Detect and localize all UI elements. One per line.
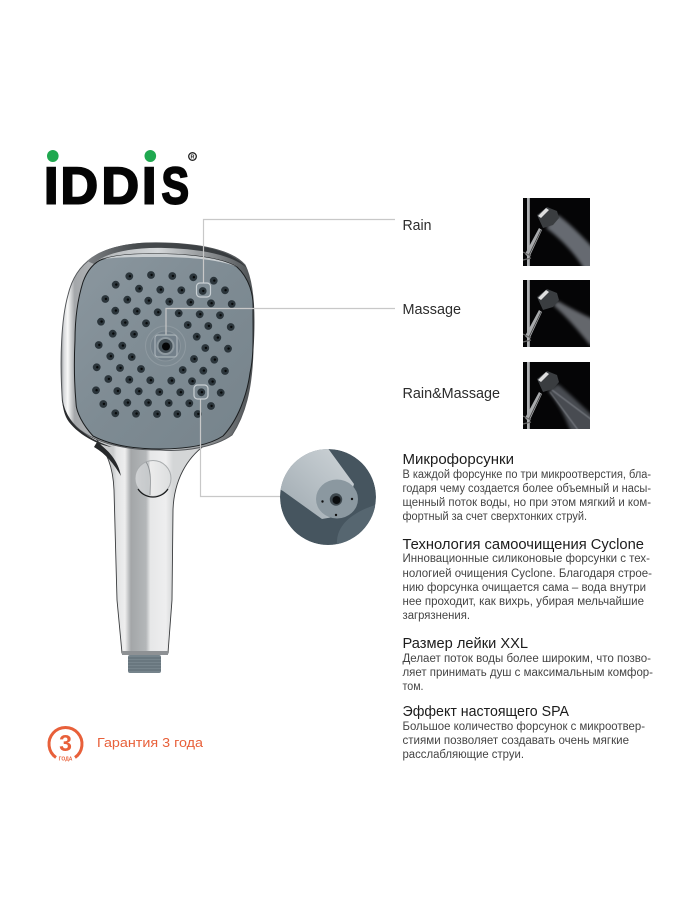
nozzle face <box>74 254 253 449</box>
shower head product <box>61 243 254 673</box>
body text: нию форсунка очищается сама – вода внутри <box>402 582 646 594</box>
mode label: Massage: Massage <box>402 302 461 318</box>
handle <box>97 440 205 653</box>
logo wordmark: D <box>60 158 98 216</box>
body text: В каждой форсунке по три микроотверстия, бла- <box>402 469 651 481</box>
callout line: Massage <box>155 308 395 357</box>
mode label: Rain&Massage: Rain&Massage <box>402 386 500 402</box>
body text <box>402 721 645 761</box>
body text: нее проходит, как вихрь, убирая мельчайшие <box>402 596 644 608</box>
registered mark <box>189 153 196 160</box>
logo green dots <box>47 150 156 162</box>
body text: ляет принимать душ с максимальным комфор- <box>402 667 653 679</box>
body text: Большое количество форсунок с микроотвер- <box>402 721 645 733</box>
badge ring and number: 3 <box>59 730 72 756</box>
warranty text: Гарантия 3 года <box>97 735 204 750</box>
warranty badge <box>49 728 204 762</box>
photo: massage mode <box>523 280 590 347</box>
badge ring and number: ГОДА <box>59 756 73 762</box>
feature: XXL size <box>402 636 653 693</box>
body text: том. <box>402 681 424 693</box>
face highlight <box>103 254 237 267</box>
body text: щенный поток воды, но при этом мягкий и ком- <box>402 497 651 509</box>
logo wordmark: D <box>102 158 139 216</box>
mode button <box>135 460 171 497</box>
body text: загрязнения. <box>402 610 470 622</box>
head chrome rim <box>61 243 254 450</box>
neck shadow <box>94 442 121 476</box>
heading: Размер лейки XXL <box>402 636 528 652</box>
feature: micro-nozzles <box>402 452 651 523</box>
photo: rain and massage mode <box>523 362 590 429</box>
photo: rain mode <box>523 198 590 266</box>
heading: Эффект настоящего SPA <box>402 704 569 720</box>
body text: Делает поток воды более широким, что позво- <box>402 653 651 665</box>
logo: IDDIS <box>44 150 196 216</box>
body text: Инновационные силиконовые форсунки с тех- <box>402 553 650 565</box>
feature: SPA effect <box>402 704 645 761</box>
callout line: Rain <box>196 220 395 297</box>
head dark lower crescent <box>62 395 112 447</box>
heading: Микрофорсунки <box>402 452 514 468</box>
body text: расслабляющие струи. <box>402 749 524 761</box>
body text: стиями позволяет создавать очень мягкие <box>402 735 629 747</box>
body text: годаря чему создается более объемный и насы- <box>402 483 651 495</box>
heading: Технология самоочищения Cyclone <box>402 537 644 553</box>
head dark top band <box>87 243 247 268</box>
badge ring and number <box>49 728 82 762</box>
logo wordmark <box>44 158 189 216</box>
body text: фортный за счет сверхтонких струй. <box>402 511 587 523</box>
nozzle detail circle <box>280 449 376 545</box>
feature: Cyclone self-cleaning <box>402 537 652 622</box>
hose thread <box>122 651 168 673</box>
body text <box>402 469 651 523</box>
logo wordmark: S <box>162 158 189 216</box>
body text: нологией очищения Cyclone. Благодаря строе- <box>402 568 652 580</box>
callout line: micro-nozzle <box>194 385 281 496</box>
center nozzle <box>146 326 186 366</box>
registered mark: R <box>191 154 195 160</box>
logo wordmark: I <box>142 158 156 216</box>
jets <box>92 271 236 418</box>
body text <box>402 553 652 622</box>
mode label: Rain: Rain <box>402 218 432 234</box>
body text <box>402 653 653 693</box>
logo wordmark: I <box>44 158 58 216</box>
